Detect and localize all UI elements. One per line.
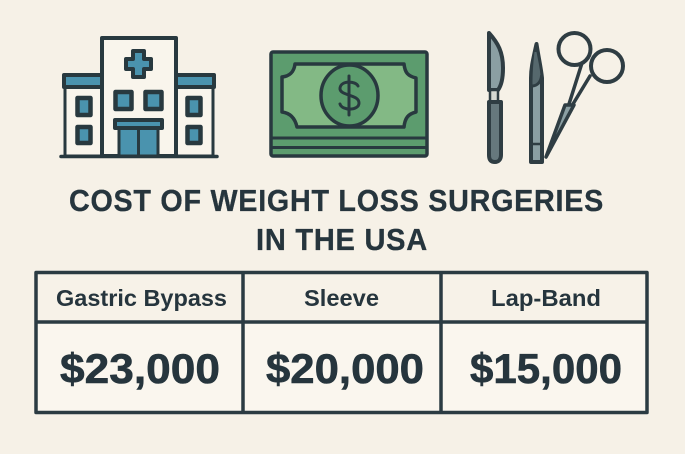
column: Gastric Bypass: $23,000	[60, 345, 220, 392]
icon: surgical tools	[489, 33, 623, 162]
column: Gastric Bypass	[56, 285, 227, 392]
icon: banknote stack	[271, 52, 427, 156]
column: Sleeve	[266, 285, 424, 392]
column: Sleeve: Sleeve	[304, 285, 379, 311]
cost table	[36, 272, 647, 413]
title: COST OF WEIGHT LOSS SURGERIES	[69, 183, 604, 218]
icon: dollar sign	[340, 76, 359, 115]
column: Lap-Band	[470, 285, 622, 392]
column: Sleeve: $20,000	[266, 345, 424, 392]
column: Lap-Band: Lap-Band	[491, 285, 601, 311]
title: IN THE USA	[256, 222, 428, 257]
scalpel	[489, 33, 503, 162]
probe	[531, 44, 542, 162]
column: Lap-Band: $15,000	[470, 345, 622, 392]
scissors	[546, 33, 623, 157]
column: Gastric Bypass: Gastric Bypass	[56, 285, 227, 311]
icon: hospital	[61, 38, 217, 156]
title	[69, 183, 604, 257]
